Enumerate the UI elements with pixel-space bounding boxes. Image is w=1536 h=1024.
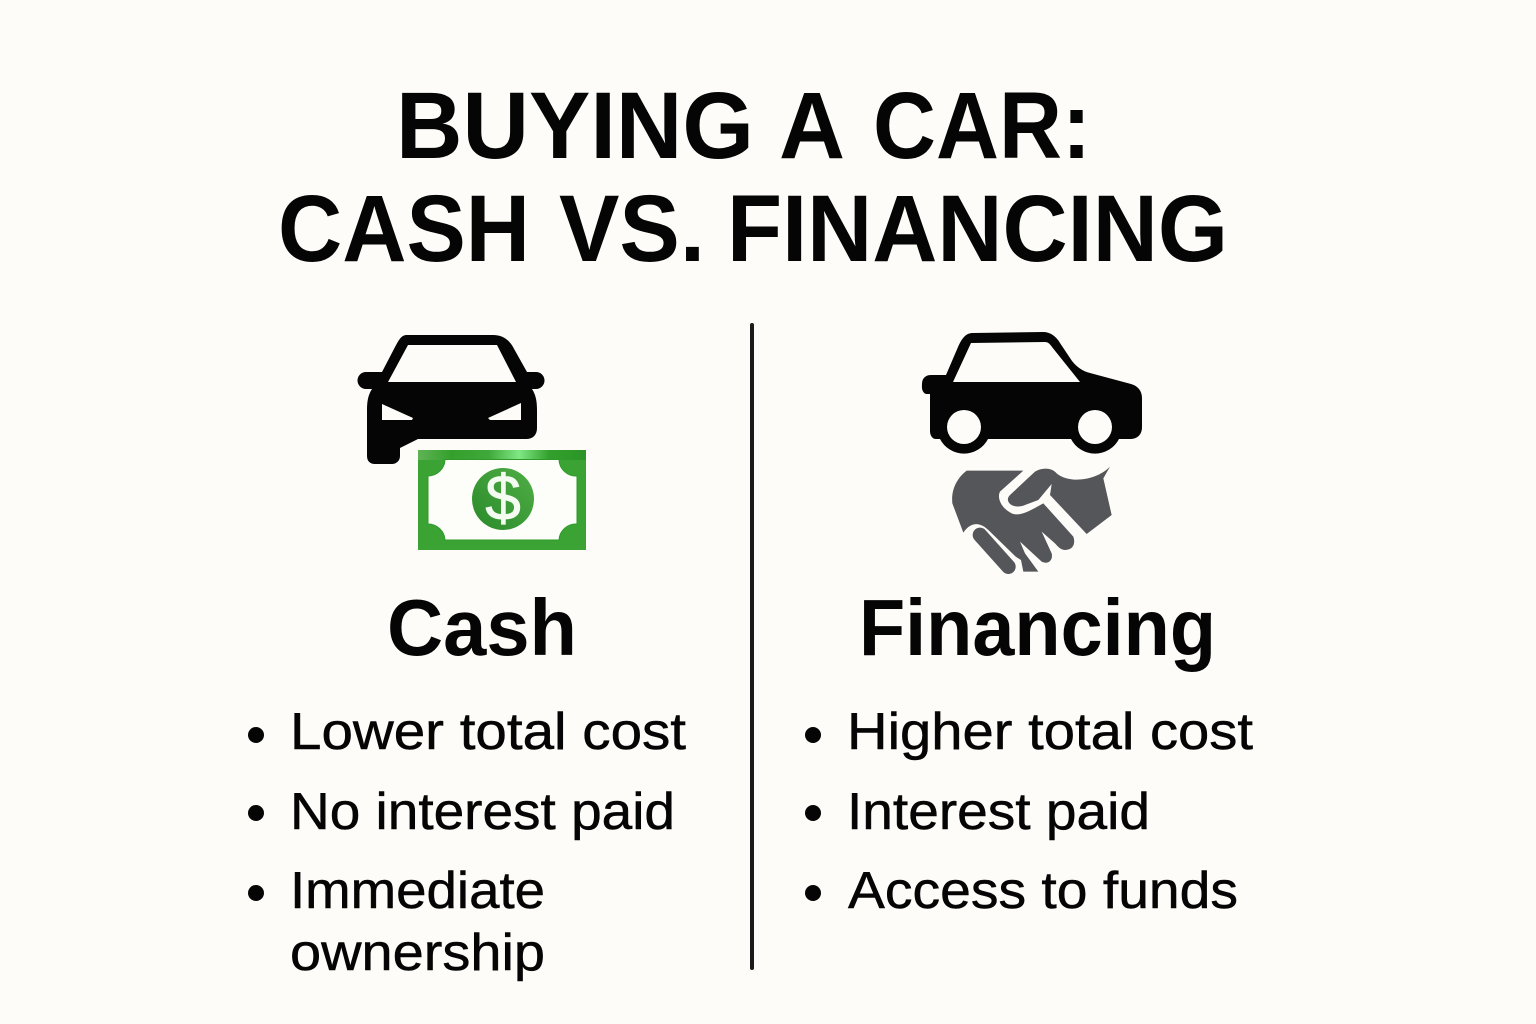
title: A <box>779 73 845 179</box>
title: VS. <box>559 176 705 282</box>
title: CASH <box>278 176 530 282</box>
panel: financing <box>805 332 1254 920</box>
panel: cash <box>248 335 687 982</box>
list: financing points <box>805 703 1254 920</box>
list: cash points: Lower total cost <box>290 703 687 761</box>
icon: handshake <box>952 467 1112 572</box>
list: financing points: Interest paid <box>847 783 1150 841</box>
icon: front-view car <box>358 335 544 464</box>
icon: side-view car <box>922 332 1142 454</box>
title: BUYING <box>396 73 754 179</box>
list: cash points: Immediate <box>290 862 545 920</box>
heading: Cash: Cash <box>387 583 577 672</box>
heading: Financing: Financing <box>859 583 1216 672</box>
list: cash points <box>248 703 687 982</box>
list: cash points: ownership <box>290 924 545 982</box>
list: financing points: Higher total cost <box>847 703 1254 761</box>
icon: green banknote <box>418 450 586 550</box>
icon: green banknote: $ <box>485 462 521 534</box>
title <box>278 73 1228 282</box>
list: cash points: No interest paid <box>290 783 675 841</box>
title: FINANCING <box>727 176 1228 282</box>
title: CAR: <box>873 73 1091 179</box>
list: financing points: Access to funds <box>848 862 1238 920</box>
divider <box>750 323 754 970</box>
